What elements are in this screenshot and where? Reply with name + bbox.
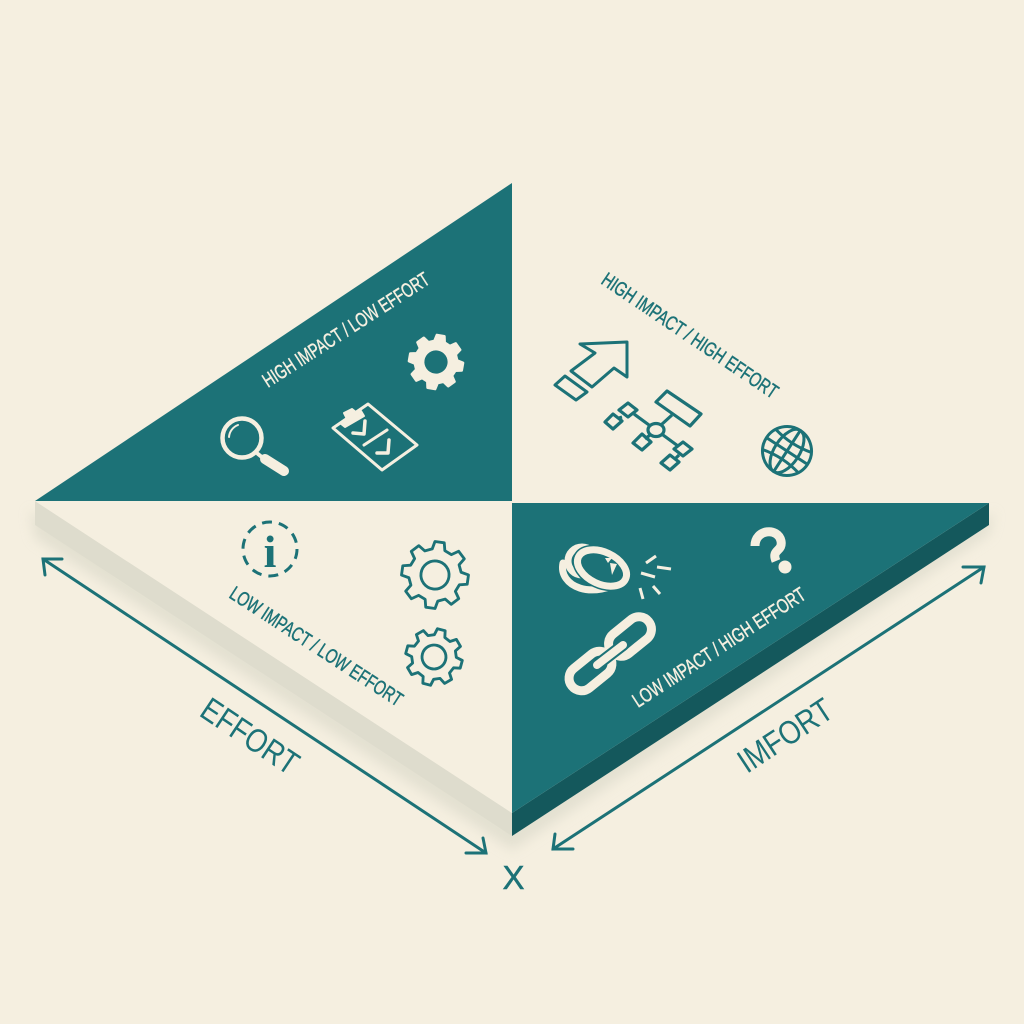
quadrant: low impact low effort face [35, 501, 512, 813]
icon: solid gear [405, 331, 467, 393]
icon: upward arrow [555, 342, 627, 400]
icon: magnifier [222, 418, 284, 471]
quadrant: high impact low effort face [35, 183, 512, 501]
heading: low impact low effort: LOW IMPACT / LOW EFFORT [225, 583, 407, 711]
heading: high impact low effort: HIGH IMPACT / LOW EFFORT [259, 269, 434, 392]
left slab side [35, 501, 512, 836]
icon: globe [753, 417, 821, 485]
axis label: effort: EFFORT [194, 690, 306, 782]
quadrant: low impact high effort face [512, 503, 989, 813]
axis label: imfort: IMFORT [730, 691, 839, 780]
icon: large outline gear [398, 538, 472, 612]
slab drop shadow [30, 510, 994, 850]
icon: knot with rays [563, 543, 671, 599]
icon: small outline gear [399, 622, 469, 692]
heading: high impact high effort: HIGH IMPACT / HIGH EFFORT [597, 269, 782, 403]
icon: info badge [243, 522, 297, 577]
quadrant: high impact high effort face [512, 183, 989, 503]
icon: org flow chart [605, 391, 701, 470]
matrix slab [30, 183, 994, 850]
knot [563, 543, 632, 593]
burst rays [640, 556, 671, 599]
axis: effort arrow [43, 559, 486, 853]
icon: question mark [755, 532, 792, 574]
right slab side [512, 503, 989, 836]
icon: info badge: i [264, 526, 277, 577]
icon: chain link [564, 612, 657, 696]
icon: code clipboard [333, 404, 417, 470]
heading: low impact high effort: LOW IMPACT / HIGH EFFORT [629, 584, 810, 712]
axis: impact arrow [553, 567, 984, 849]
corner mark: x: X [502, 859, 524, 896]
